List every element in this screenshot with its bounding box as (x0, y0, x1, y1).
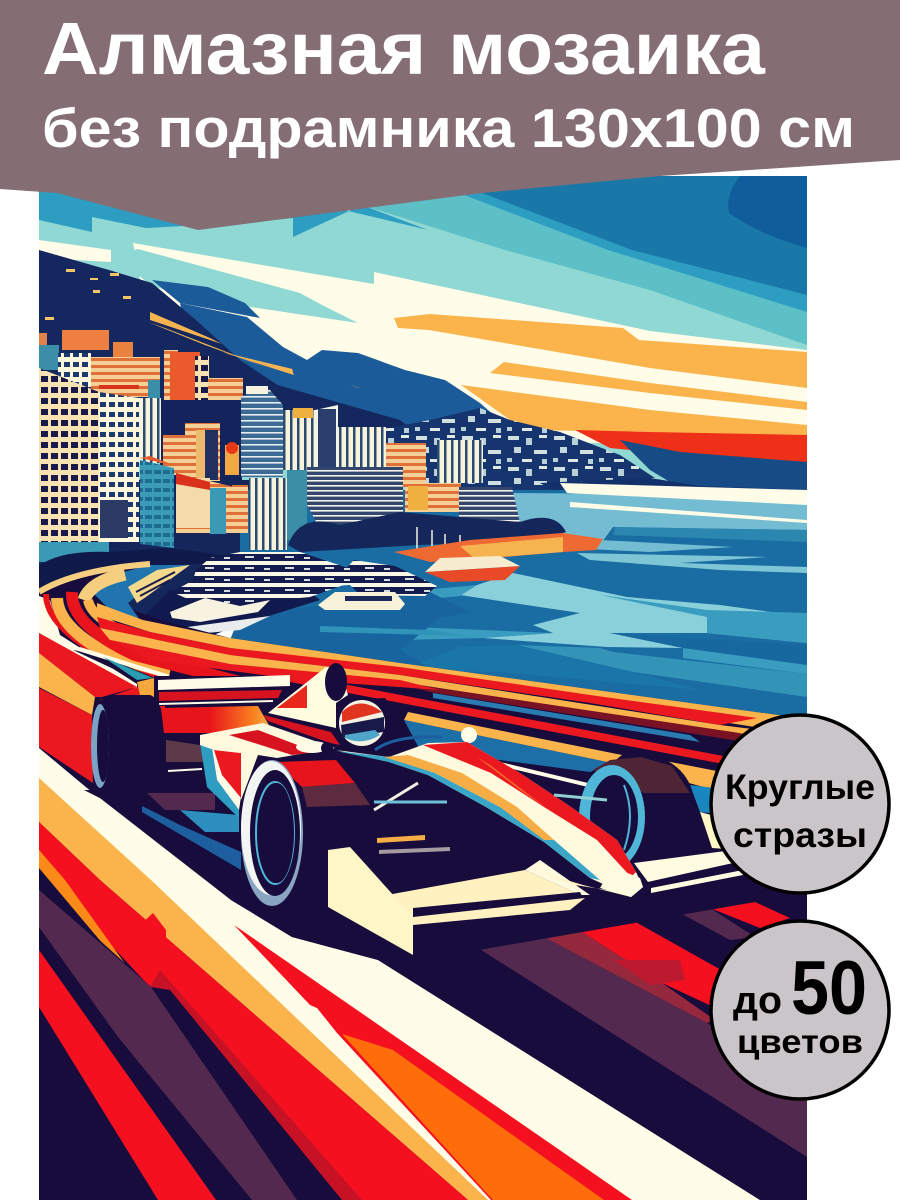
racing car (84, 663, 807, 960)
rear left wheel (91, 695, 165, 792)
front wing (328, 847, 743, 955)
distant hillside town (378, 408, 807, 494)
sidepod (200, 723, 335, 818)
rear blue strip (180, 810, 239, 832)
badge: up to 50 colours: цветов (737, 1023, 863, 1060)
city buildings (39, 330, 566, 590)
lower right shadow stripes (378, 880, 807, 1200)
harbour yachts (143, 527, 603, 640)
subtitle: без подрамника 130х100 см (42, 97, 855, 159)
suspension arms (374, 783, 607, 810)
rear road shadow detail (147, 793, 215, 810)
right rear wheel (579, 757, 692, 861)
cockpit (376, 698, 387, 700)
dark blue road strip (142, 806, 241, 870)
sea (39, 480, 807, 730)
air box (263, 663, 348, 745)
rear bodywork (161, 706, 269, 772)
header banner (0, 0, 900, 230)
nose (336, 742, 643, 897)
badge: round rhinestones: стразы (733, 816, 867, 855)
steering arc (375, 737, 442, 750)
mountains (39, 250, 491, 428)
badge: round rhinestones (711, 715, 889, 893)
side navy body (300, 760, 590, 885)
badge: up to 50 colours: до (733, 980, 782, 1022)
front left wheel (241, 760, 374, 907)
side mirror bulge (296, 741, 333, 754)
badge: up to 50 colours: 50 (791, 946, 867, 1031)
mirror (461, 727, 477, 743)
badge: up to 50 colours (711, 921, 889, 1099)
badge: round rhinestones: Круглые (725, 768, 875, 807)
side detail lines (377, 835, 450, 854)
poster artwork: Monaco race scene (39, 176, 807, 1200)
sky (39, 176, 807, 506)
lower left road stripes (39, 633, 760, 1200)
top road curve (39, 564, 807, 1200)
rear wing (137, 675, 290, 706)
helmet (339, 700, 385, 746)
title: main heading: Алмазная мозаика (42, 7, 766, 90)
car shadow (84, 790, 807, 960)
